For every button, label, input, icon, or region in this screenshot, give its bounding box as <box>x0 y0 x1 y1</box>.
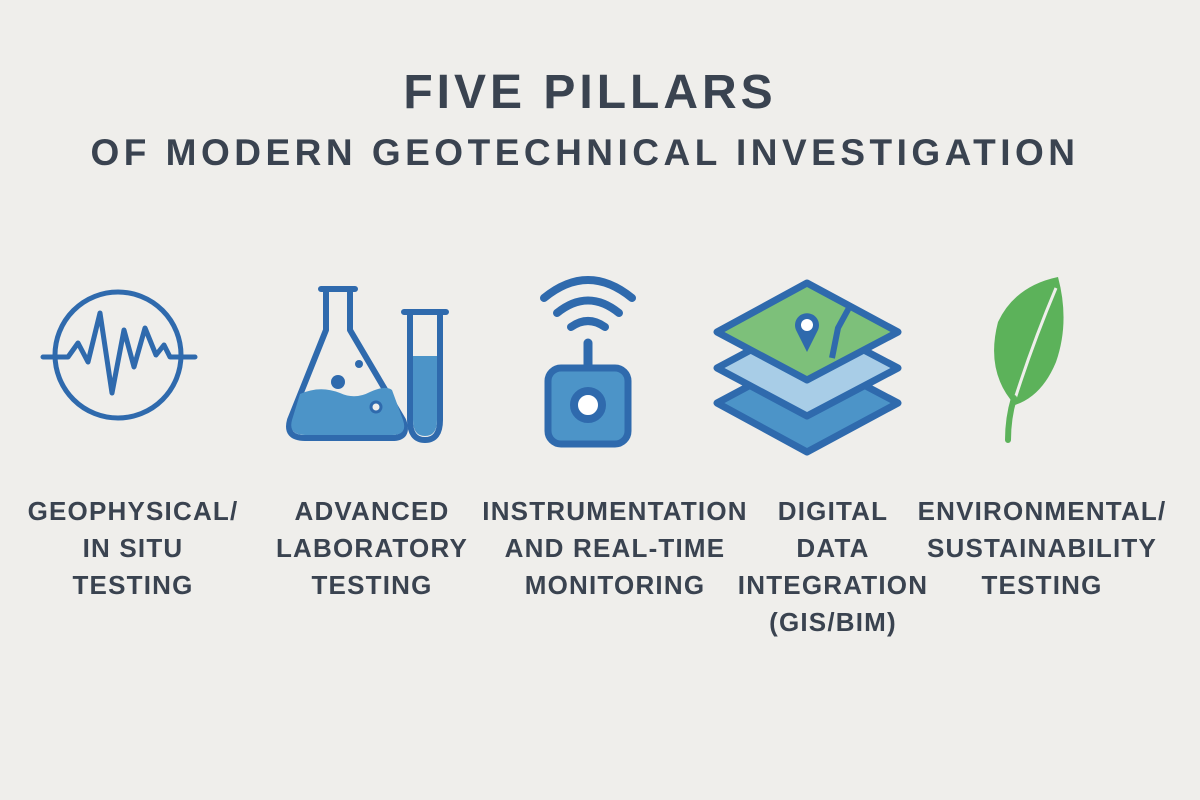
label: instrumentation: AND REAL-TIME <box>505 533 725 563</box>
icon: wireless sensor <box>544 280 632 444</box>
label: instrumentation <box>482 496 748 600</box>
label: laboratory: TESTING <box>311 570 433 600</box>
title: FIVE PILLARS <box>403 66 777 119</box>
label: environmental: ENVIRONMENTAL/ <box>918 496 1166 526</box>
label: laboratory: ADVANCED <box>294 496 450 526</box>
title <box>90 66 1080 173</box>
icon: lab flask and test tube <box>289 289 446 440</box>
icon: seismic wave circle <box>43 292 195 418</box>
label: environmental: TESTING <box>981 570 1103 600</box>
title: OF MODERN GEOTECHNICAL INVESTIGATION <box>90 132 1080 173</box>
label: geophysical: IN SITU <box>83 533 183 563</box>
label: geophysical: GEOPHYSICAL/ <box>28 496 238 526</box>
label: laboratory <box>276 496 468 600</box>
icon: leaf <box>994 277 1064 440</box>
label: environmental <box>918 496 1166 600</box>
label: environmental: SUSTAINABILITY <box>927 533 1157 563</box>
label: laboratory: LABORATORY <box>276 533 468 563</box>
label: digital data <box>738 496 928 637</box>
icon: GIS layers <box>717 283 898 452</box>
label: geophysical: TESTING <box>72 570 194 600</box>
label: geophysical <box>28 496 238 600</box>
label: digital data: INTEGRATION <box>738 570 928 600</box>
label: instrumentation: MONITORING <box>525 570 705 600</box>
label: digital data: (GIS/BIM) <box>769 607 897 637</box>
label: digital data: DATA <box>796 533 870 563</box>
label: digital data: DIGITAL <box>778 496 888 526</box>
label: instrumentation: INSTRUMENTATION <box>482 496 748 526</box>
